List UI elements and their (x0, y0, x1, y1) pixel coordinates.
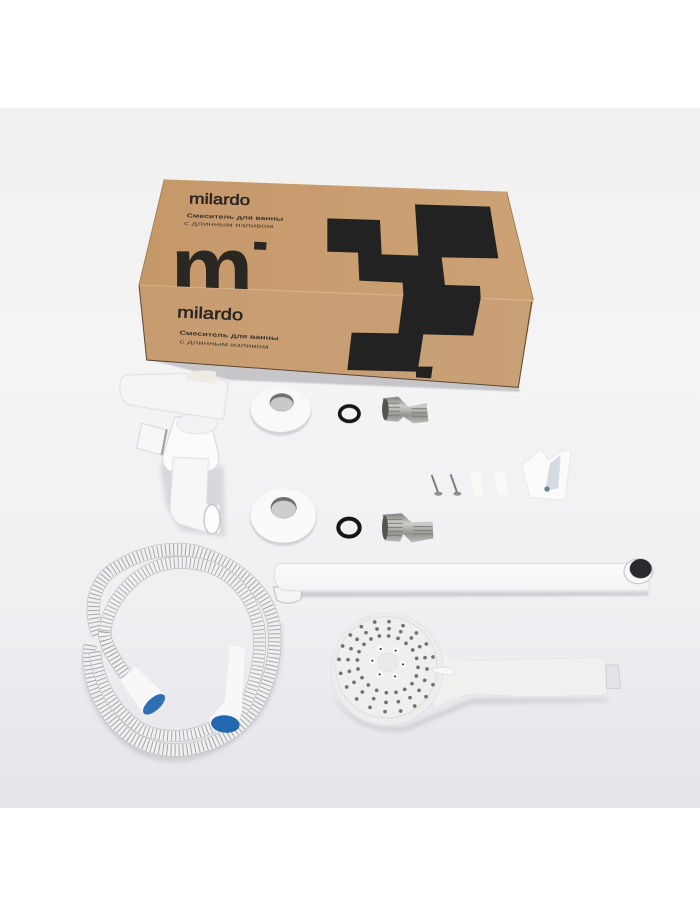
shower head shadow (332, 693, 608, 732)
faucet shadow (160, 463, 225, 537)
lower o-ring (338, 519, 360, 537)
spout shadow (285, 592, 648, 597)
lower flange (250, 489, 317, 546)
inner nozzles (369, 646, 406, 680)
faucet parts row (120, 370, 571, 546)
spout base (273, 587, 302, 603)
upper flange (250, 387, 311, 436)
hose strand outer (89, 550, 275, 750)
large m logo: m (171, 218, 253, 316)
left hose cap (120, 667, 168, 718)
product subtitle on top face: с длинным изливом (184, 221, 274, 230)
shower head disc (331, 613, 443, 725)
photo backdrop (0, 108, 700, 808)
faucet side block (137, 423, 167, 455)
box front face (139, 285, 533, 387)
product name on front face: Смеситель для ванны (179, 331, 279, 342)
shower head nozzles (337, 620, 435, 713)
spout and shower head (273, 559, 653, 732)
faucet stem (163, 417, 219, 471)
faucet body (120, 370, 228, 537)
brand logo on front face: milardo (177, 304, 244, 324)
box top face (139, 179, 533, 300)
lower arm (170, 457, 220, 533)
logo square (254, 242, 267, 250)
shower handle (433, 650, 607, 710)
upper o-ring (340, 406, 359, 421)
product photo infographic (0, 108, 700, 808)
spout arm (274, 563, 650, 591)
centre button (378, 653, 397, 672)
shower head face (336, 617, 437, 718)
black pixel graphic (327, 204, 498, 378)
screws (432, 474, 461, 496)
lower arm ring (204, 505, 220, 534)
hose shadow (89, 625, 276, 756)
box shadow (143, 358, 520, 392)
chrome ring (162, 429, 167, 455)
lever knob (185, 370, 216, 384)
product subtitle on front face: с длинным изливом (179, 339, 269, 351)
shower thread (606, 665, 620, 688)
shower mode tab (431, 667, 454, 675)
hose strand inner (105, 562, 260, 712)
box edge lines (139, 179, 533, 300)
wall plugs (470, 472, 508, 496)
brand logo on top face: milardo (189, 191, 250, 209)
hose strand lower arc (95, 652, 213, 736)
lever handle (120, 373, 228, 419)
lower connector (382, 513, 433, 542)
shower hose (89, 550, 276, 756)
hose strand to left cap (105, 632, 128, 678)
cardboard box (139, 179, 533, 392)
spout aerator (624, 559, 653, 584)
upper connector (382, 397, 428, 423)
shower holder (522, 449, 571, 500)
product name on top face: Смеситель для ванны (187, 213, 284, 223)
right hose cap (209, 645, 245, 734)
collar (177, 413, 218, 434)
